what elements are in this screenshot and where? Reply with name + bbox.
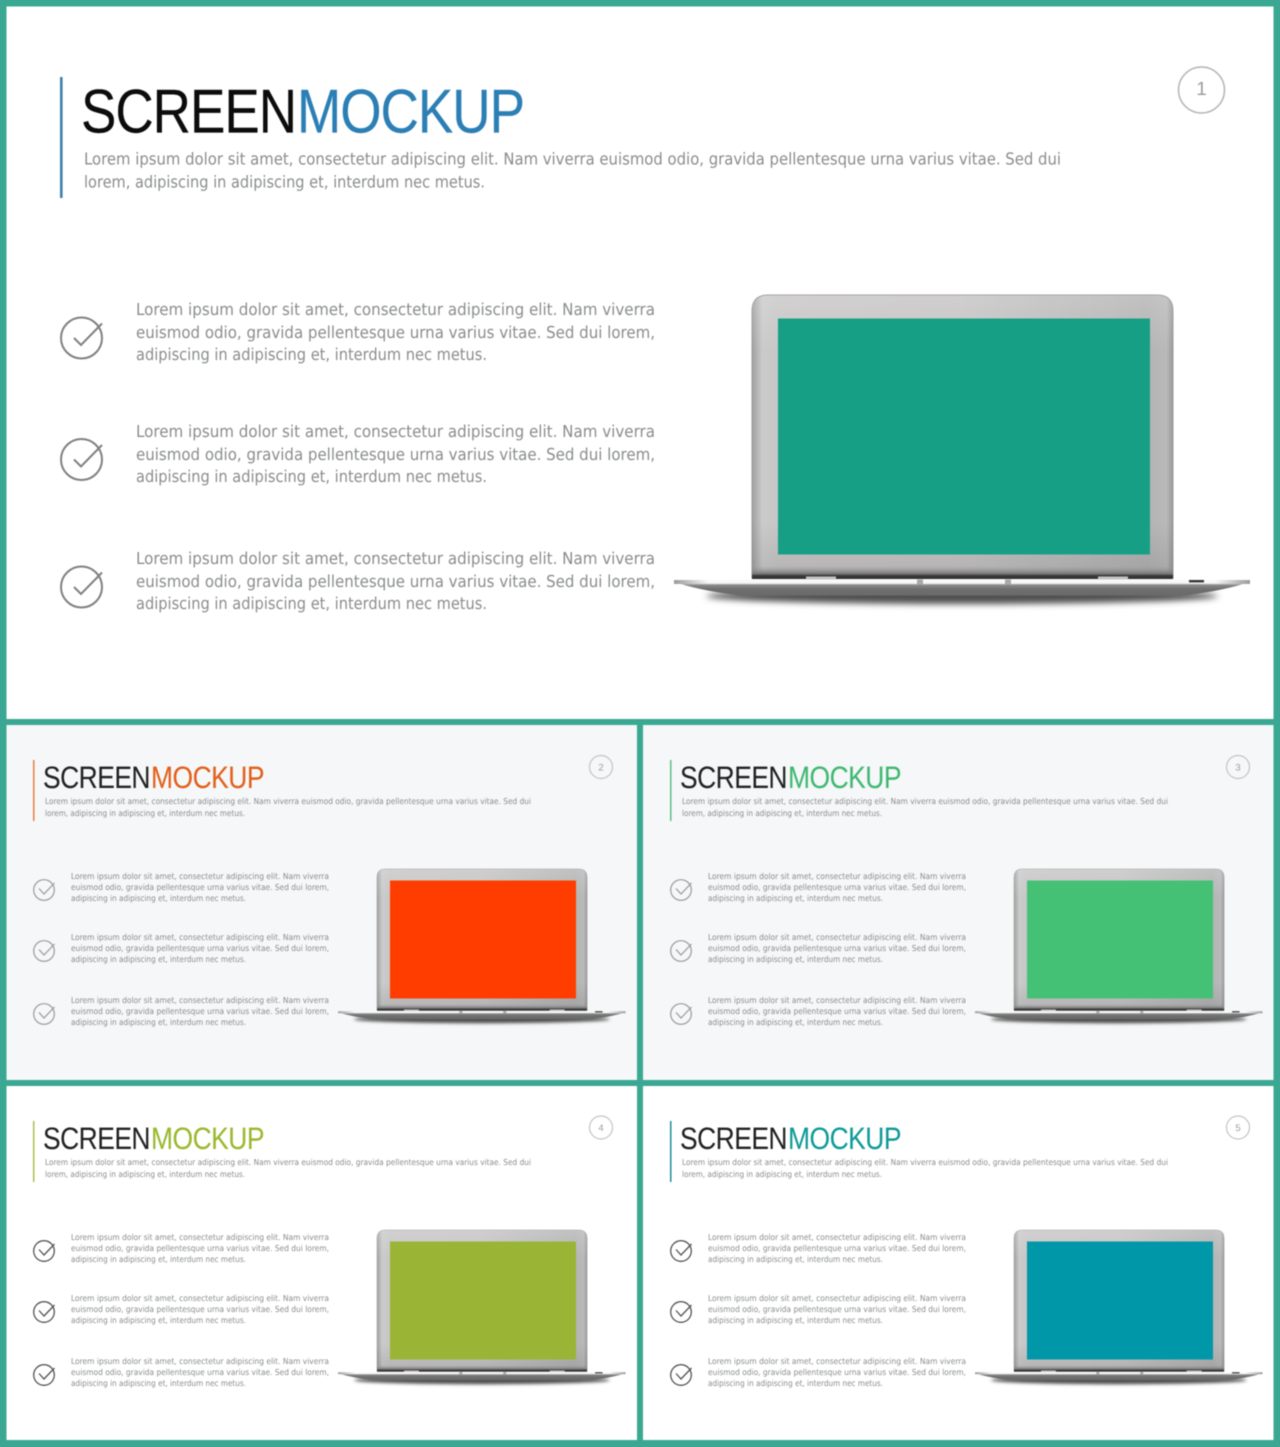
page number badge: 2 — [598, 762, 604, 774]
title: MOCKUP — [151, 760, 264, 795]
text block 2: Lorem ipsum dolor sit amet, consectetur adipiscing elit. Nam viverra — [708, 932, 966, 942]
subtitle: Lorem ipsum dolor sit amet, consectetur adipiscing elit. Nam viverra euismod odio, gravida pellentesque urna varius vitae. Sed dui — [45, 796, 531, 806]
text block 3: euismod odio, gravida pellentesque urna varius vitae. Sed dui lorem, — [71, 1006, 329, 1016]
page number badge — [1178, 67, 1224, 113]
page number badge: 3 — [1235, 762, 1241, 774]
text block 2: euismod odio, gravida pellentesque urna varius vitae. Sed dui lorem, — [71, 1304, 329, 1314]
text block 1 — [708, 871, 966, 903]
subtitle: lorem, adipiscing in adipiscing et, interdum nec metus. — [682, 1169, 882, 1179]
text block 2: Lorem ipsum dolor sit amet, consectetur adipiscing elit. Nam viverra — [71, 932, 329, 942]
text block 2: adipiscing in adipiscing et, interdum nec metus. — [708, 1315, 883, 1325]
icon: check 1 — [34, 880, 54, 900]
panel: slide 1 main — [6, 6, 1274, 719]
icon: check 1 — [671, 880, 692, 900]
page number badge: 5 — [1235, 1123, 1241, 1134]
title: MOCKUP — [151, 1121, 264, 1156]
text block 3: euismod odio, gravida pellentesque urna varius vitae. Sed dui lorem, — [708, 1006, 966, 1016]
text block 3: adipiscing in adipiscing et, interdum nec metus. — [708, 1378, 883, 1388]
subtitle: lorem, adipiscing in adipiscing et, interdum nec metus. — [682, 808, 882, 818]
icon: check 2 — [61, 439, 102, 480]
text block 1: adipiscing in adipiscing et, interdum nec metus. — [71, 893, 246, 903]
text block 1 — [136, 300, 655, 364]
panel 4 background — [6, 1086, 637, 1440]
text block 3: Lorem ipsum dolor sit amet, consectetur adipiscing elit. Nam viverra — [71, 995, 329, 1005]
page number badge: 4 — [598, 1123, 604, 1134]
text block 2 — [136, 422, 655, 486]
text block 2: Lorem ipsum dolor sit amet, consectetur adipiscing elit. Nam viverra — [136, 422, 655, 441]
accent bar — [670, 1121, 672, 1182]
text block 1: Lorem ipsum dolor sit amet, consectetur adipiscing elit. Nam viverra — [71, 1232, 329, 1242]
subtitle — [84, 150, 1061, 192]
icon: check 3 — [671, 1004, 692, 1024]
text block 2 — [708, 932, 966, 964]
text block 3: euismod odio, gravida pellentesque urna varius vitae. Sed dui lorem, — [136, 572, 655, 591]
text block 1: adipiscing in adipiscing et, interdum nec metus. — [708, 1254, 883, 1264]
text block 1: Lorem ipsum dolor sit amet, consectetur adipiscing elit. Nam viverra — [708, 871, 966, 881]
laptop mockup — [337, 1230, 626, 1384]
text block 3: Lorem ipsum dolor sit amet, consectetur adipiscing elit. Nam viverra — [136, 549, 655, 568]
accent bar — [60, 77, 63, 198]
text block 3 — [71, 1356, 329, 1388]
text block 2 — [71, 932, 329, 964]
subtitle — [682, 796, 1168, 818]
text block 1: euismod odio, gravida pellentesque urna varius vitae. Sed dui lorem, — [708, 1243, 966, 1253]
text block 2: adipiscing in adipiscing et, interdum nec metus. — [708, 954, 883, 964]
laptop mockup — [974, 1230, 1263, 1384]
icon: check 3 — [34, 1365, 54, 1385]
accent bar — [670, 760, 672, 821]
accent bar — [33, 1121, 34, 1182]
text block 3: euismod odio, gravida pellentesque urna varius vitae. Sed dui lorem, — [71, 1367, 329, 1377]
subtitle: lorem, adipiscing in adipiscing et, interdum nec metus. — [45, 1169, 245, 1179]
text block 1 — [71, 1232, 329, 1264]
subtitle: Lorem ipsum dolor sit amet, consectetur adipiscing elit. Nam viverra euismod odio, gravida pellentesque urna varius vitae. Sed dui — [682, 1157, 1168, 1167]
text block 1 — [708, 1232, 966, 1264]
panel: slide 5 teal — [643, 1086, 1274, 1440]
subtitle: lorem, adipiscing in adipiscing et, interdum nec metus. — [84, 172, 485, 192]
text block 2: euismod odio, gravida pellentesque urna varius vitae. Sed dui lorem, — [71, 943, 329, 953]
title: SCREEN — [81, 78, 296, 146]
panel: slide 3 green — [643, 725, 1274, 1080]
title: MOCKUP — [788, 760, 901, 795]
text block 1: Lorem ipsum dolor sit amet, consectetur adipiscing elit. Nam viverra — [708, 1232, 966, 1242]
text block 1: euismod odio, gravida pellentesque urna varius vitae. Sed dui lorem, — [136, 323, 655, 342]
text block 2: euismod odio, gravida pellentesque urna varius vitae. Sed dui lorem, — [708, 943, 966, 953]
panel 3 background — [643, 725, 1274, 1080]
icon: check 1 — [61, 318, 102, 358]
icon: check 1 — [34, 1241, 54, 1261]
icon: check 2 — [671, 1302, 692, 1322]
title: SCREEN — [680, 760, 787, 795]
subtitle: lorem, adipiscing in adipiscing et, interdum nec metus. — [45, 808, 245, 818]
laptop mockup — [337, 869, 626, 1023]
text block 3: adipiscing in adipiscing et, interdum nec metus. — [71, 1378, 246, 1388]
title: SCREEN — [43, 760, 150, 795]
text block 1: Lorem ipsum dolor sit amet, consectetur adipiscing elit. Nam viverra — [136, 300, 655, 319]
text block 3: Lorem ipsum dolor sit amet, consectetur adipiscing elit. Nam viverra — [71, 1356, 329, 1366]
page number badge — [1226, 1116, 1250, 1139]
text block 3: euismod odio, gravida pellentesque urna varius vitae. Sed dui lorem, — [708, 1367, 966, 1377]
panel 2 background — [6, 725, 637, 1080]
text block 2: adipiscing in adipiscing et, interdum nec metus. — [136, 467, 487, 486]
text block 3: adipiscing in adipiscing et, interdum nec metus. — [136, 594, 487, 613]
text block 1: euismod odio, gravida pellentesque urna varius vitae. Sed dui lorem, — [708, 882, 966, 892]
text block 3 — [71, 995, 329, 1027]
page number badge — [590, 756, 612, 778]
text block 1: adipiscing in adipiscing et, interdum nec metus. — [708, 893, 883, 903]
page number badge: 1 — [1196, 79, 1207, 100]
title: SCREEN — [680, 1121, 787, 1156]
text block 1: adipiscing in adipiscing et, interdum nec metus. — [71, 1254, 246, 1264]
text block 2: Lorem ipsum dolor sit amet, consectetur adipiscing elit. Nam viverra — [71, 1293, 329, 1303]
subtitle: Lorem ipsum dolor sit amet, consectetur adipiscing elit. Nam viverra euismod odio, gravida pellentesque urna varius vitae. Sed dui — [682, 796, 1168, 806]
laptop mockup — [672, 295, 1252, 604]
panel 1 background — [6, 6, 1274, 719]
icon: check 3 — [61, 566, 102, 608]
title: MOCKUP — [297, 78, 524, 146]
text block 2: adipiscing in adipiscing et, interdum nec metus. — [71, 954, 246, 964]
title: SCREEN — [43, 1121, 150, 1156]
text block 2 — [708, 1293, 966, 1325]
subtitle — [45, 1157, 531, 1179]
subtitle — [682, 1157, 1168, 1179]
panel: slide 2 orange — [6, 725, 637, 1080]
text block 2: euismod odio, gravida pellentesque urna varius vitae. Sed dui lorem, — [136, 445, 655, 464]
text block 3: Lorem ipsum dolor sit amet, consectetur adipiscing elit. Nam viverra — [708, 1356, 966, 1366]
icon: check 3 — [34, 1004, 54, 1024]
icon: check 2 — [671, 941, 692, 961]
text block 3: adipiscing in adipiscing et, interdum nec metus. — [708, 1017, 883, 1027]
laptop mockup — [974, 869, 1263, 1023]
page number badge — [590, 1116, 612, 1139]
text block 1: euismod odio, gravida pellentesque urna varius vitae. Sed dui lorem, — [71, 1243, 329, 1253]
text block 3: adipiscing in adipiscing et, interdum nec metus. — [71, 1017, 246, 1027]
subtitle — [45, 796, 531, 818]
text block 2: euismod odio, gravida pellentesque urna varius vitae. Sed dui lorem, — [708, 1304, 966, 1314]
page number badge — [1226, 756, 1250, 778]
text block 1: Lorem ipsum dolor sit amet, consectetur adipiscing elit. Nam viverra — [71, 871, 329, 881]
icon: check 2 — [34, 1302, 54, 1322]
accent bar — [33, 760, 34, 821]
text block 3 — [708, 995, 966, 1027]
text block 2: adipiscing in adipiscing et, interdum nec metus. — [71, 1315, 246, 1325]
subtitle: Lorem ipsum dolor sit amet, consectetur adipiscing elit. Nam viverra euismod odio, gravida pellentesque urna varius vitae. Sed dui — [84, 150, 1061, 168]
text block 3 — [136, 549, 655, 613]
panel 5 background — [643, 1086, 1274, 1440]
panel: slide 4 lime — [6, 1086, 637, 1440]
subtitle: Lorem ipsum dolor sit amet, consectetur adipiscing elit. Nam viverra euismod odio, gravida pellentesque urna varius vitae. Sed dui — [45, 1157, 531, 1167]
text block 1 — [71, 871, 329, 903]
title: MOCKUP — [788, 1121, 901, 1156]
icon: check 3 — [671, 1365, 692, 1385]
text block 2 — [71, 1293, 329, 1325]
text block 1: euismod odio, gravida pellentesque urna varius vitae. Sed dui lorem, — [71, 882, 329, 892]
text block 3: Lorem ipsum dolor sit amet, consectetur adipiscing elit. Nam viverra — [708, 995, 966, 1005]
icon: check 2 — [34, 941, 54, 961]
text block 3 — [708, 1356, 966, 1388]
text block 2: Lorem ipsum dolor sit amet, consectetur adipiscing elit. Nam viverra — [708, 1293, 966, 1303]
text block 1: adipiscing in adipiscing et, interdum nec metus. — [136, 345, 487, 364]
icon: check 1 — [671, 1241, 692, 1261]
